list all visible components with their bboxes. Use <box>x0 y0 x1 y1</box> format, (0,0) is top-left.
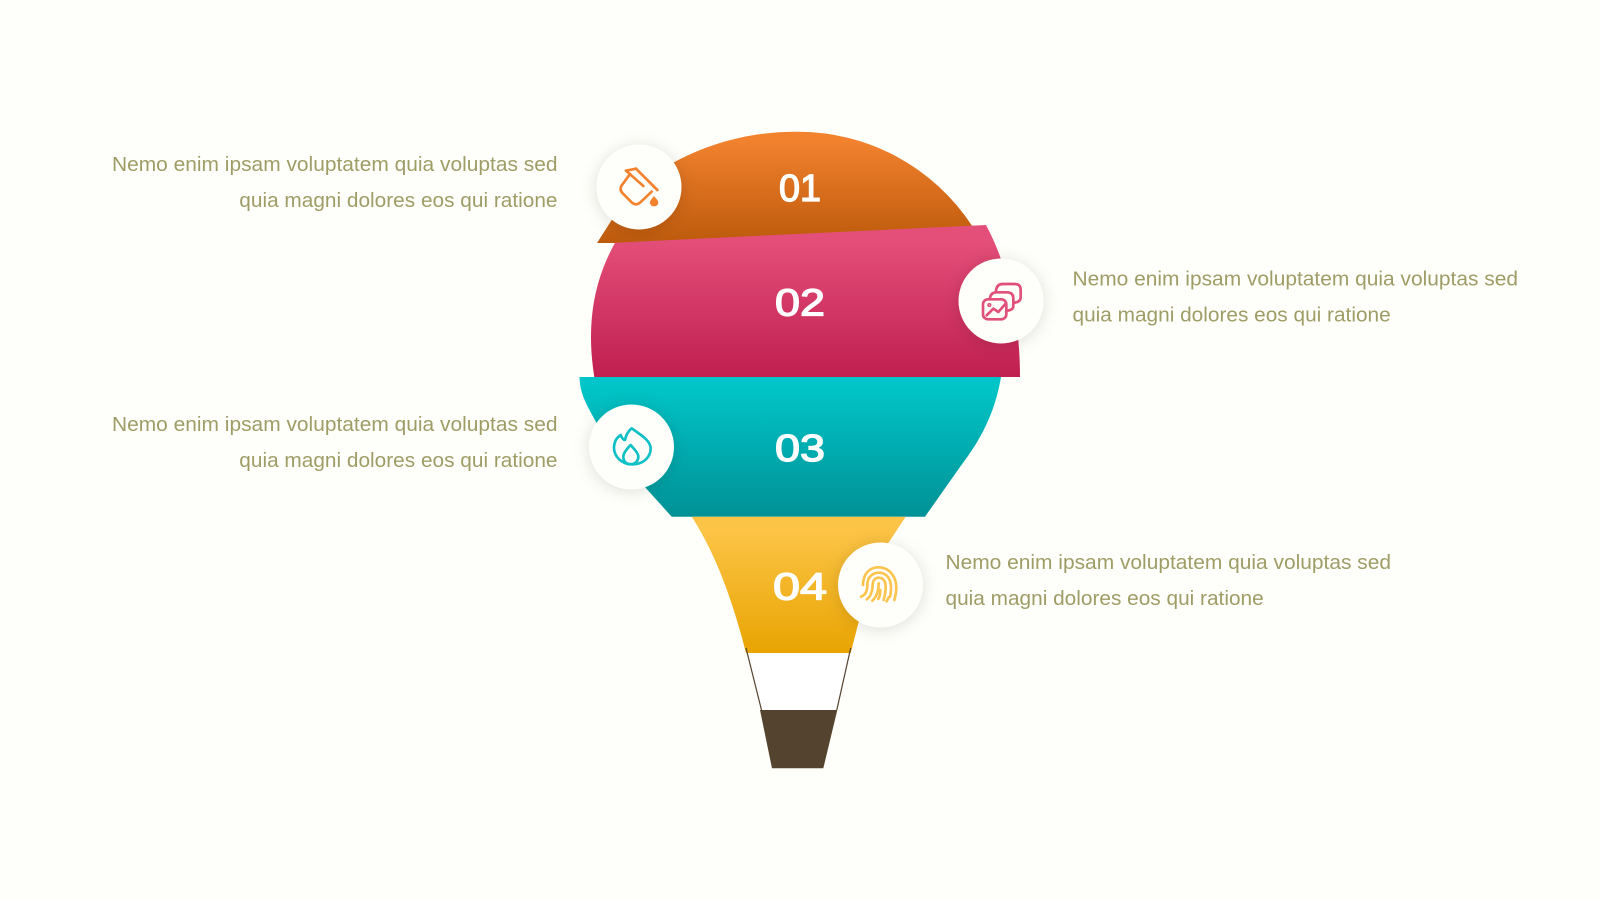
text block 02: quia magni dolores eos qui ratione <box>1072 303 1391 326</box>
balloon segment 03 <box>580 377 1001 517</box>
number 04: 04 <box>773 566 827 608</box>
icon badge 02: stacked images <box>958 258 1044 344</box>
text block 03: quia magni dolores eos qui ratione <box>239 449 558 472</box>
text block 02 <box>1072 267 1518 326</box>
text block 01 <box>112 153 558 212</box>
balloon segment 01 <box>597 132 972 243</box>
text block 01: Nemo enim ipsam voluptatem quia voluptas sed <box>112 153 558 176</box>
number 03: 03 <box>775 428 825 470</box>
number 02: 02 <box>775 282 825 324</box>
number 01: 01 <box>779 168 821 210</box>
text block 02: Nemo enim ipsam voluptatem quia voluptas sed <box>1072 267 1518 290</box>
text block 01: quia magni dolores eos qui ratione <box>239 189 558 212</box>
basket ropes <box>746 648 851 710</box>
balloon segment 04 <box>692 517 906 653</box>
basket <box>760 710 837 768</box>
text block 03: Nemo enim ipsam voluptatem quia voluptas sed <box>112 413 558 436</box>
icon badge 01: paint bucket <box>596 144 682 230</box>
icon badge 04: fingerprint <box>838 542 923 628</box>
text block 03 <box>112 413 558 472</box>
balloon segment 02 <box>591 225 1020 377</box>
icon badge 03: flame <box>589 404 674 490</box>
text block 04: quia magni dolores eos qui ratione <box>946 587 1264 610</box>
text block 04: Nemo enim ipsam voluptatem quia voluptas sed <box>946 551 1391 574</box>
text block 04 <box>946 551 1391 610</box>
